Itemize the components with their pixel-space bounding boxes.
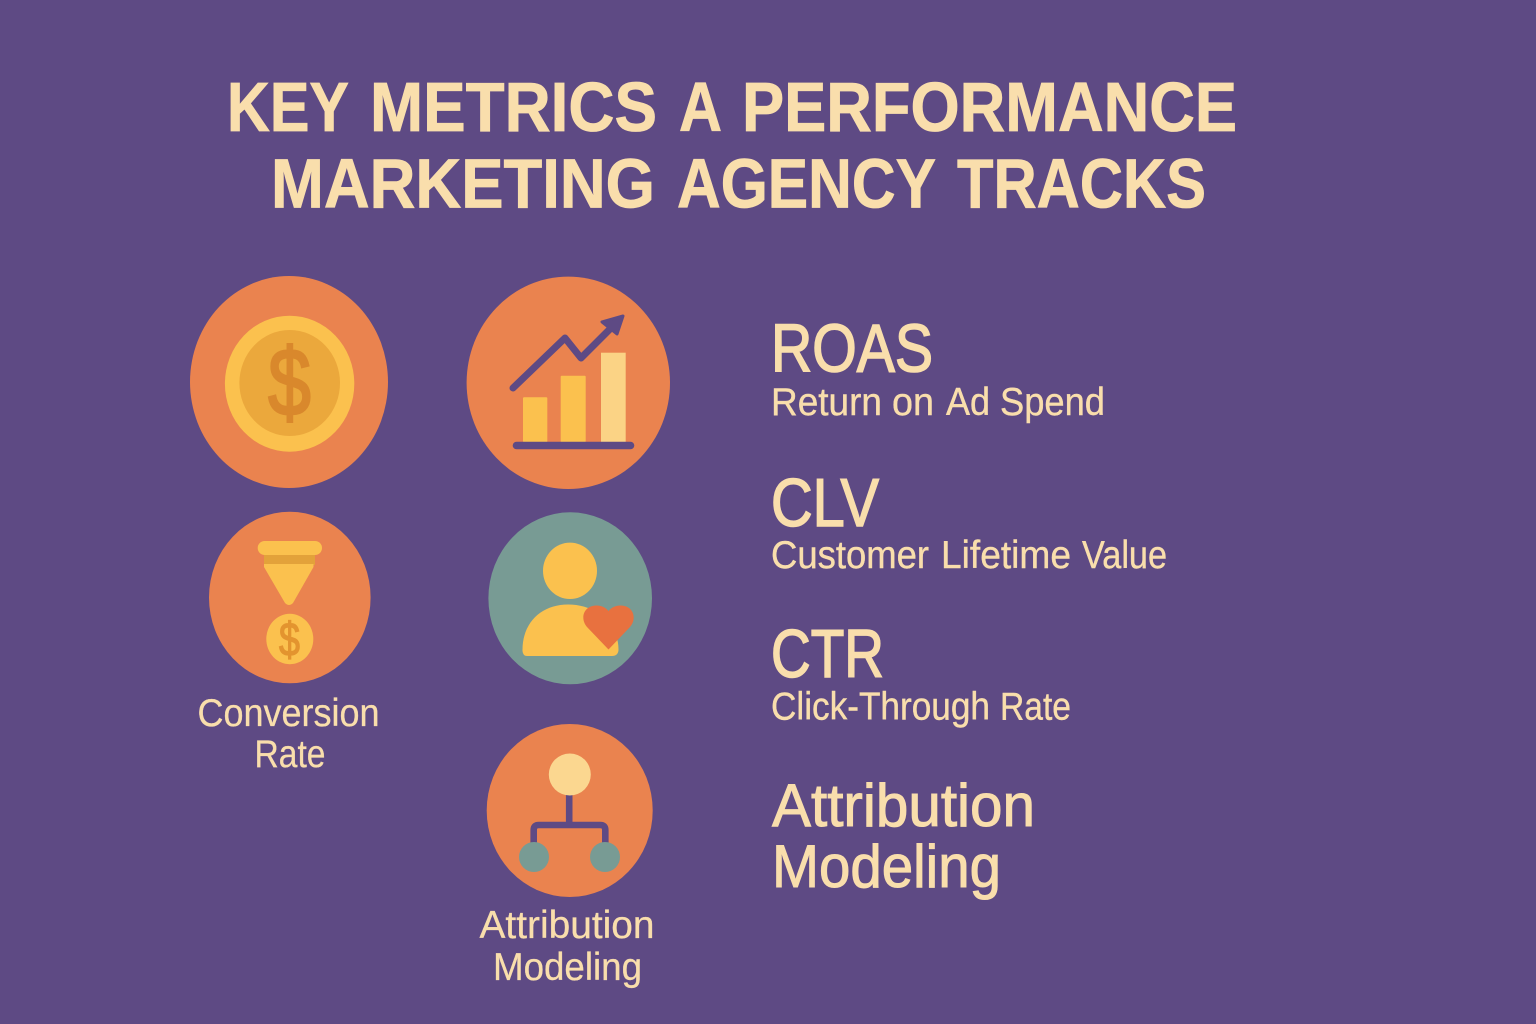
icon: attribution hierarchy [487,724,653,897]
metric: CTR [771,616,1071,728]
metric: CTR: CTR [771,616,884,692]
icon: growth bar chart [467,277,670,489]
metric: CTR: Click-Through [771,686,990,728]
label: attribution modeling under icon: Modeling [493,946,642,989]
icon: customer with heart [488,512,652,684]
metric: ROAS: ROAS [771,310,933,386]
title: METRICS [370,68,657,146]
metric: CLV: Lifetime [941,534,1071,577]
title: TRACKS [957,144,1206,222]
metric: ROAS [771,310,1105,424]
metric: attribution modeling [772,772,1035,900]
metric: attribution modeling: Attribution [772,772,1035,839]
metric: ROAS: on [892,381,934,424]
metric: CLV: Customer [771,534,929,577]
icon: conversion funnel [209,512,371,683]
icon: conversion funnel: $ [279,614,300,667]
metric: ROAS: Spend [1000,381,1105,424]
label: attribution modeling under icon [480,904,654,989]
icon: coin: $ [268,329,311,436]
label: conversion rate: Conversion [198,692,380,735]
label: conversion rate [198,692,380,776]
title: PERFORMANCE [742,68,1237,146]
title: MARKETING [271,144,655,222]
label: attribution modeling under icon: Attribution [480,904,654,947]
title: AGENCY [677,144,936,222]
metric: attribution modeling: Modeling [772,833,1001,900]
title: A [679,68,722,146]
metric: CLV: CLV [771,465,880,541]
metric: ROAS: Return [771,381,882,424]
metric: CLV: Value [1082,534,1167,577]
title: KEY [227,68,349,146]
title [227,68,1237,222]
metric: CTR: Rate [1000,686,1071,728]
metric: CLV [771,465,1167,577]
metric: ROAS: Ad [946,381,990,424]
icon: coin [190,276,388,488]
label: conversion rate: Rate [254,733,326,776]
